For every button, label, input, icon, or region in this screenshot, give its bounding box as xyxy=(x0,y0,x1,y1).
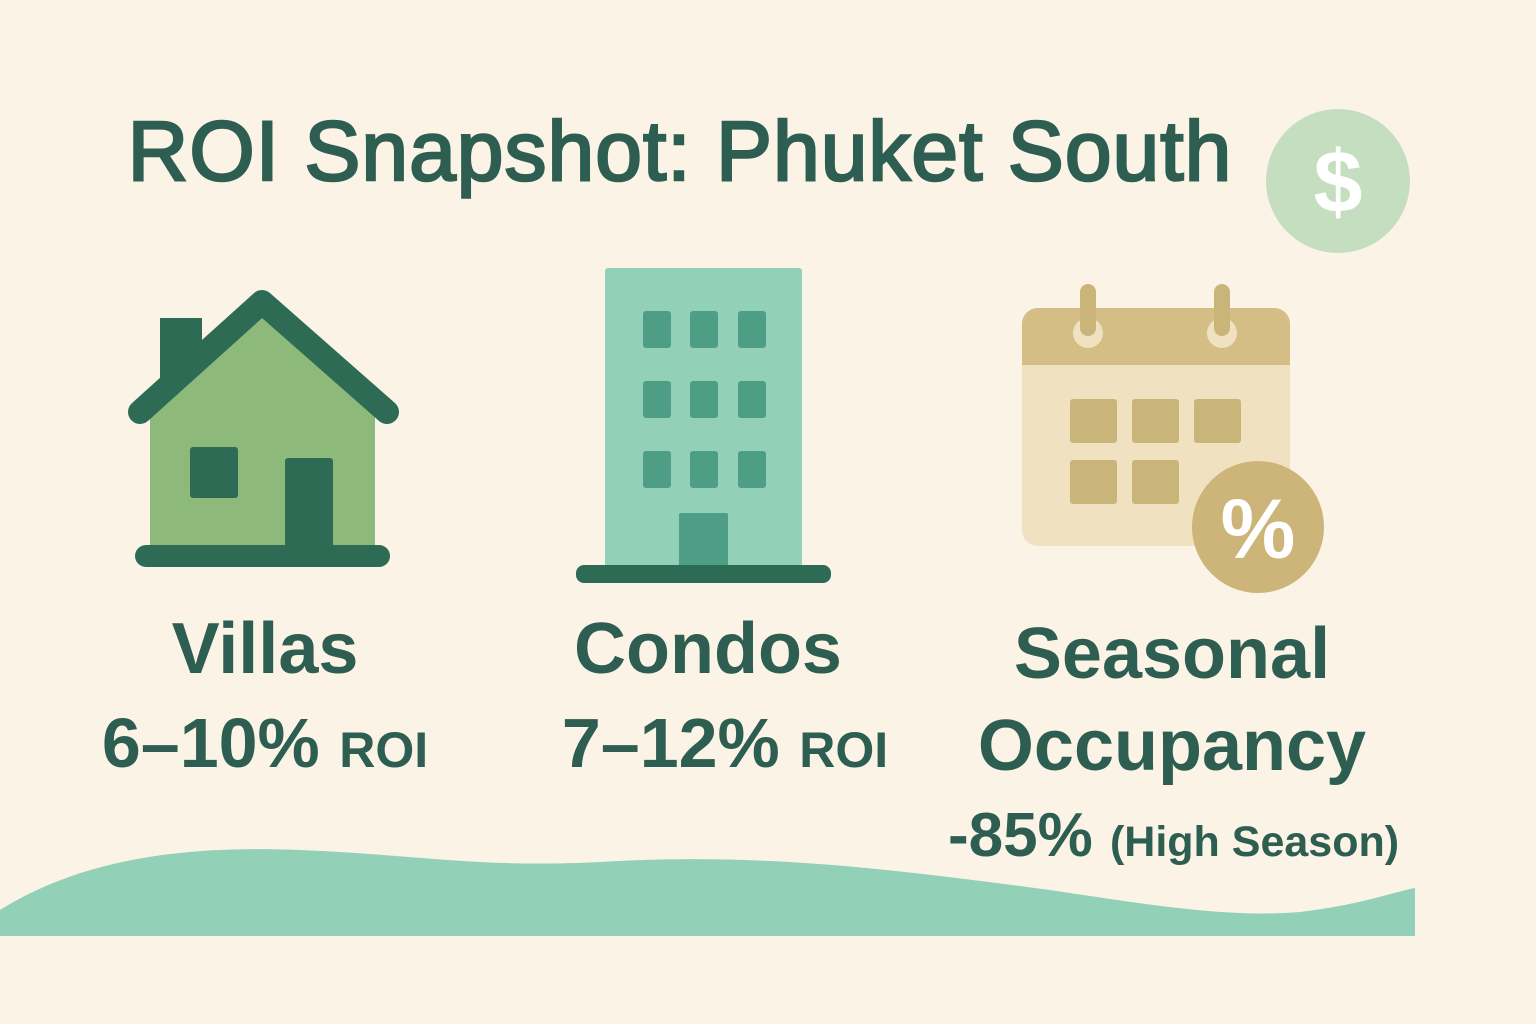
label: seasonal occupancy: Seasonal xyxy=(1014,614,1330,694)
icon: calendar with percent: % xyxy=(1221,482,1295,576)
label: seasonal occupancy xyxy=(978,614,1366,786)
icon: dollar coin: $ xyxy=(1314,132,1362,231)
value: villas ROI: 6–10% ROI xyxy=(102,704,428,782)
label: villas: Villas xyxy=(172,609,358,689)
label: seasonal occupancy: Occupancy xyxy=(978,706,1366,786)
label: condos: Condos xyxy=(574,609,842,689)
title: ROI Snapshot: Phuket South xyxy=(128,104,1232,198)
value: condos ROI: 7–12% ROI xyxy=(562,704,888,782)
value: occupancy: -85% (High Season) xyxy=(948,801,1399,870)
